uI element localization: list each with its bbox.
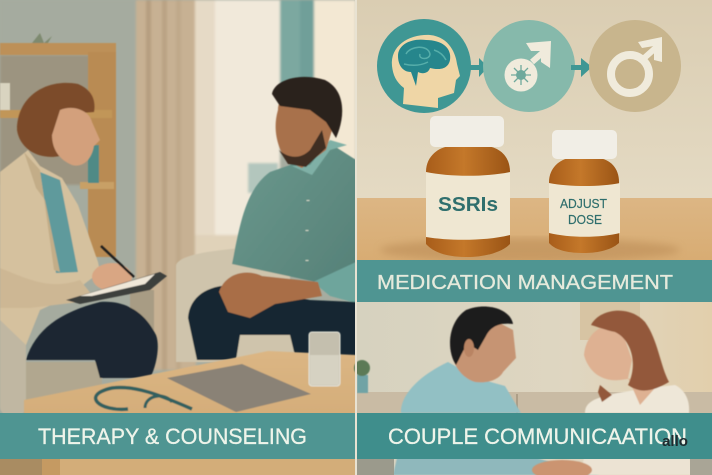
arrow [470, 58, 488, 77]
blazer [0, 150, 100, 345]
hands [219, 273, 322, 318]
banner: couple communication [356, 413, 712, 459]
arm and sleeve [0, 268, 96, 308]
blouse [40, 172, 78, 273]
stethoscope [96, 387, 192, 409]
hair [272, 77, 342, 138]
plant [354, 360, 370, 393]
arrow [571, 58, 592, 77]
hair [17, 83, 94, 157]
client [176, 77, 356, 362]
glass [309, 332, 340, 386]
pill bottle: SSRIs [426, 116, 510, 257]
cuff [313, 262, 356, 303]
bookcase [0, 33, 116, 257]
face [52, 108, 100, 166]
shirt [232, 142, 356, 303]
icon: brain in head circle [377, 19, 471, 113]
icon: male symbol circle [589, 20, 681, 112]
hand [92, 263, 132, 291]
clipboard [66, 272, 167, 304]
beard [279, 130, 326, 167]
pill bottle: adjust dose [549, 130, 620, 253]
man [393, 306, 600, 475]
pill bottle: SSRIs: SSRIs [438, 194, 498, 216]
chair left [0, 305, 26, 415]
panel: medication management [356, 0, 712, 262]
pill bottle: adjust dose: ADJUST [560, 196, 607, 211]
neck and face [276, 89, 332, 168]
coffee table [24, 332, 356, 475]
banner: medication management [356, 260, 712, 302]
banner: medication management: MEDICATION MANAGEMENT [377, 271, 674, 294]
panel: couple communication [354, 302, 712, 475]
therapist [0, 83, 167, 416]
banner: therapy and counseling [0, 413, 356, 459]
collar [292, 140, 347, 175]
trousers [188, 285, 356, 360]
sofa [356, 392, 712, 422]
icon: sperm cell male symbol circle [483, 20, 575, 112]
pill bottle: adjust dose: DOSE [568, 212, 602, 227]
banner: therapy and counseling: THERAPY & COUNSELING [38, 424, 307, 449]
logo: allo: allo [662, 433, 688, 450]
skirt/trousers [26, 302, 158, 378]
panel: therapy and counseling scene [0, 0, 356, 475]
pen [101, 246, 134, 277]
woman [532, 311, 692, 475]
banner: couple communication: COUPLE COMMUNICAATION [388, 424, 687, 449]
buttons [307, 200, 308, 261]
laptop [167, 364, 311, 412]
sofa [176, 248, 356, 362]
